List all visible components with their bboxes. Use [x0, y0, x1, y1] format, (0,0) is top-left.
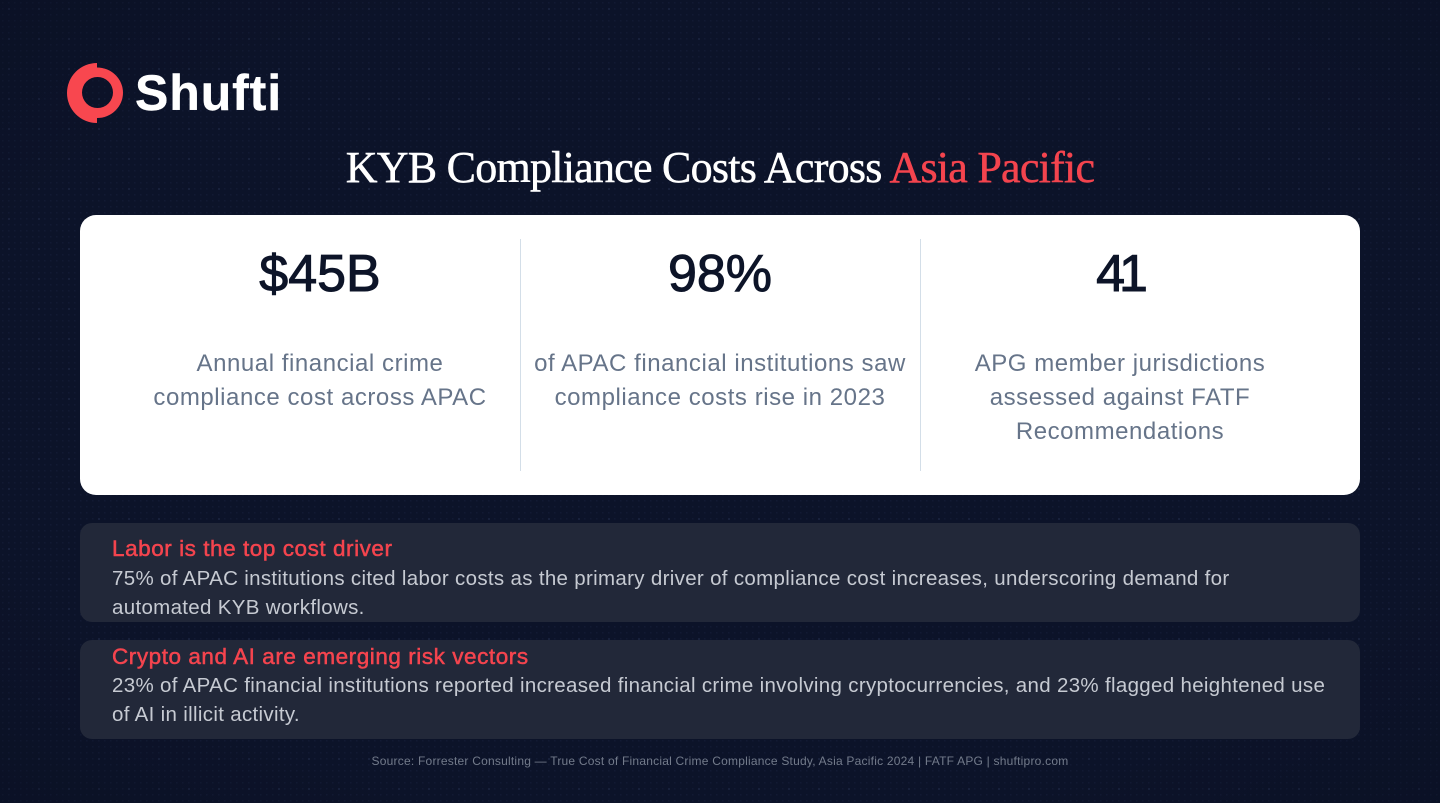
heading: labor: Labor is the top cost driver	[112, 536, 393, 561]
panel: labor cost driver	[80, 523, 1360, 622]
stat: $45B: $45B	[259, 245, 381, 303]
stat: $45B: Annual financial crime	[197, 350, 443, 377]
text: labor: automated KYB workflows.	[112, 596, 365, 619]
text: crypto	[112, 674, 1325, 726]
stat: 41: Recommendations	[1016, 418, 1224, 445]
stat: $45B: compliance cost across APAC	[153, 384, 487, 411]
title: KYB Compliance Costs Across Asia Pacific	[346, 143, 1094, 192]
icon: logo ring	[67, 63, 123, 123]
stat: 98%: of APAC financial institutions saw	[534, 350, 906, 377]
text: crypto: 23% of APAC financial institutions reported increased financial crime involving cryptocurrencies, and 23% flagged heightened use	[112, 674, 1325, 697]
text: labor	[112, 567, 1230, 619]
source note: Source: Forrester Consulting — True Cost of Financial Crime Compliance Study, Asia Pacific 2024 | FATF APG | shuftipro.com	[372, 754, 1068, 768]
stat: 41	[974, 245, 1265, 445]
stat: 98%: compliance costs rise in 2023	[555, 384, 885, 411]
stat: $45B	[153, 245, 487, 411]
panel: key statistics	[80, 215, 1360, 495]
logo: Shufti	[67, 63, 282, 123]
text: crypto: of AI in illicit activity.	[112, 703, 300, 726]
text: labor: 75% of APAC institutions cited labor costs as the primary driver of compliance cost increases, underscoring demand for	[112, 567, 1230, 590]
stat: 98%	[520, 239, 921, 471]
panel: crypto and AI	[80, 640, 1360, 739]
stat: 41: 41	[1096, 245, 1142, 303]
stat: 98%: 98%	[668, 245, 772, 303]
stat: 41: APG member jurisdictions	[975, 350, 1265, 377]
heading: crypto: Crypto and AI are emerging risk vectors	[112, 644, 529, 669]
stat: 41: assessed against FATF	[990, 384, 1250, 411]
logo wordmark: Shufti	[135, 65, 282, 121]
